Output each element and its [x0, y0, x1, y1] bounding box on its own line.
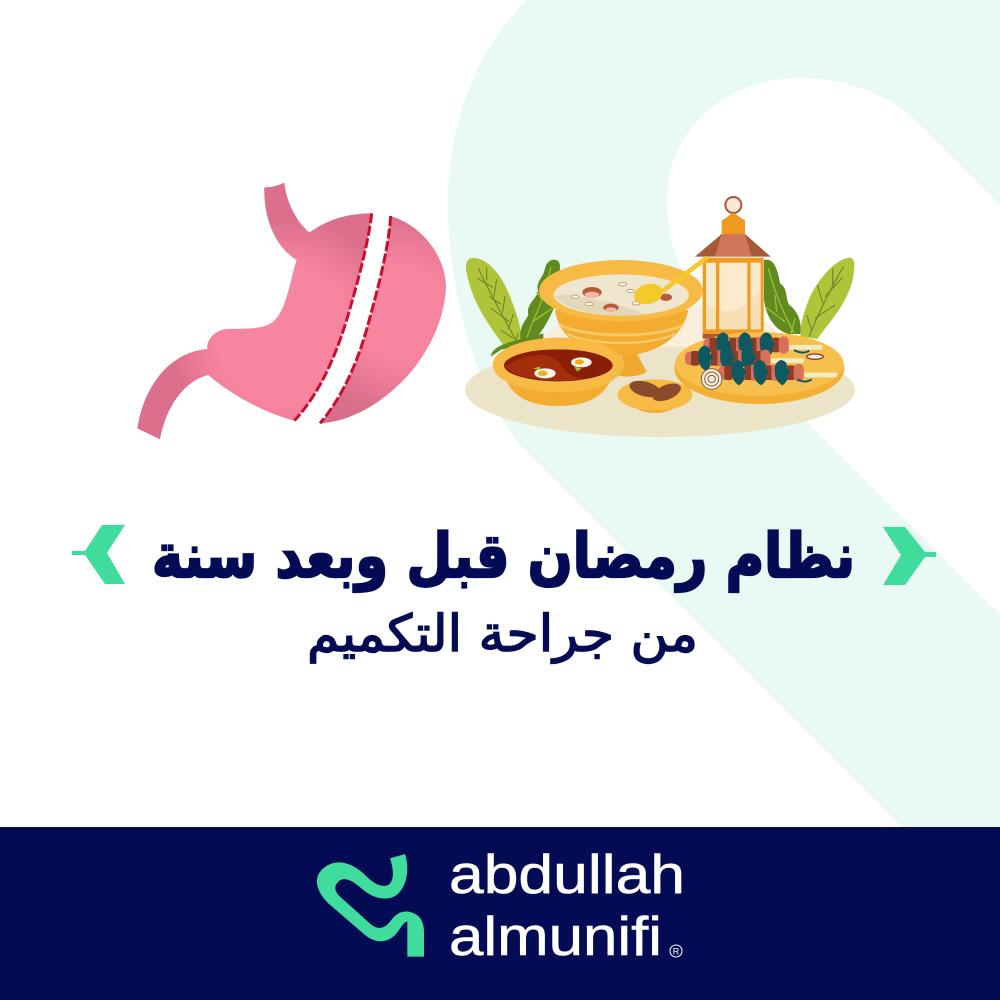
date dish: [618, 378, 692, 413]
lantern body: [703, 258, 764, 335]
bowl body: [505, 377, 612, 406]
bowl rim: [539, 260, 703, 321]
right light leaf: [800, 258, 854, 339]
soup toppings: [571, 283, 672, 312]
logo text: almunifi: almunifi: [449, 905, 662, 967]
logo text: abdullah: abdullah: [449, 843, 685, 905]
left light leaf: [466, 258, 522, 345]
illustration: ramadan food table: [465, 197, 855, 437]
background: mint curved shape: [448, 0, 1000, 827]
dates: [628, 378, 662, 400]
small left leaf tip: [491, 333, 543, 357]
icon: stomach with sleeve cut: [137, 183, 446, 439]
bowl rim: [493, 338, 624, 392]
broth: [504, 349, 613, 381]
eggs: [533, 357, 592, 378]
heading: subtitle: من جراحة التكميم: [307, 605, 698, 664]
dashed cut line right: [320, 216, 391, 423]
table plate: [465, 343, 855, 437]
logo mark: [317, 854, 424, 957]
heading: main title: نظام رمضان قبل وبعد سنة: [152, 520, 855, 593]
registered mark: [670, 945, 682, 957]
big soup bowl: [539, 258, 706, 376]
icon: left chevron: [72, 525, 125, 584]
lantern roof: [722, 213, 745, 234]
skewers: [685, 332, 837, 385]
cucumber slices: [794, 350, 812, 381]
spoon: [664, 258, 706, 290]
pale backdrop: [543, 306, 777, 347]
left dark leaf: [520, 260, 560, 341]
registered mark: R: [673, 946, 680, 956]
bowl foot: [615, 353, 647, 376]
bowl body: [555, 310, 688, 356]
icon: right chevron: [883, 527, 936, 585]
right dark leaf: [764, 260, 801, 334]
skewer platter: [674, 332, 844, 404]
platter: [674, 333, 844, 404]
dashed cut line left: [294, 213, 372, 421]
lantern: [695, 197, 771, 339]
onion ring: [701, 369, 722, 389]
stomach remaining sleeve: [137, 183, 372, 439]
soup: [554, 274, 689, 316]
footer band: [0, 827, 1000, 1000]
lantern ring: [725, 197, 741, 213]
stomach removed part: [320, 216, 446, 423]
soup bowl with eggs: [493, 338, 624, 406]
